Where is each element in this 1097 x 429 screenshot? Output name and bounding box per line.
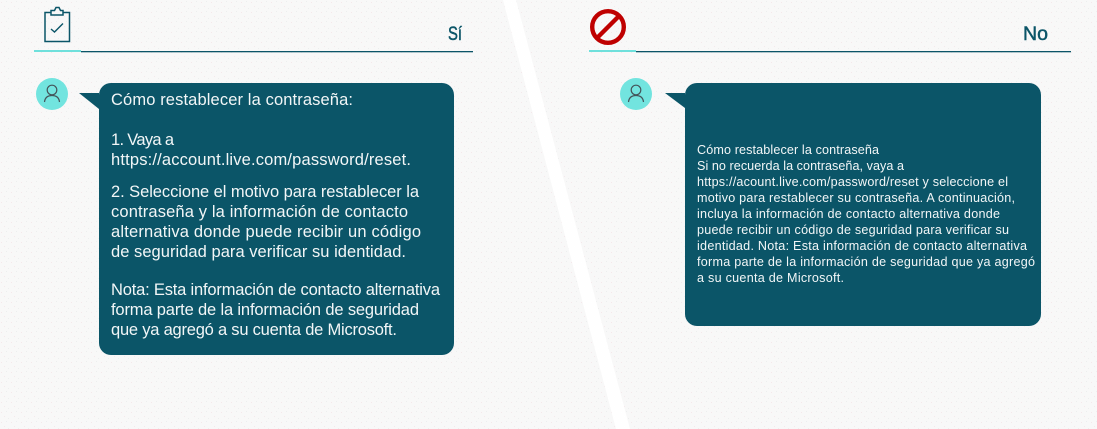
- bubble text: incluya la información de contacto alternativa donde: [697, 207, 1000, 221]
- bubble text: contraseña y la información de contacto: [111, 203, 408, 221]
- bubble text: Cómo restablecer la contraseña: [697, 143, 879, 157]
- bubble text: a su cuenta de Microsoft.: [697, 271, 844, 285]
- white diagonal divider: [503, 0, 630, 429]
- speech bubble: [79, 83, 454, 355]
- bubble text: que ya agregó a su cuenta de Microsoft.: [111, 321, 397, 339]
- bubble text: Nota: Esta información de contacto alternativa: [111, 281, 441, 299]
- icon: user avatar: [36, 78, 68, 110]
- bubble text: [111, 91, 441, 339]
- bubble text: forma parte de la información de seguridad que ya agregó: [697, 255, 1035, 269]
- bubble text: https://account.live.com/password/reset.: [111, 151, 411, 169]
- bubble text: alternativa donde puede recibir un código: [111, 223, 421, 241]
- heading: Sí: Sí: [448, 24, 463, 45]
- icon: prohibited sign: [592, 11, 624, 43]
- panel: No: [589, 11, 1071, 326]
- bubble text: de seguridad para verificar su identidad.: [111, 243, 406, 261]
- icon: user avatar: [620, 78, 652, 110]
- speech bubble: [665, 83, 1041, 326]
- bubble text: motivo para restablecer su contraseña. A continuación,: [697, 191, 1015, 205]
- bubble text: puede recibir un código de seguridad para verificar su: [697, 223, 1009, 237]
- bubble text: Si no recuerda la contraseña, vaya a: [697, 159, 904, 173]
- bubble text: forma parte de la información de seguridad: [111, 301, 419, 319]
- bubble text: Cómo restablecer la contraseña:: [111, 91, 353, 109]
- icon: clipboard with check: [45, 8, 70, 42]
- header rule: [589, 50, 1071, 52]
- bubble text: 1. Vaya a: [111, 131, 175, 149]
- header rule: [34, 50, 473, 52]
- bubble text: [697, 143, 1035, 285]
- bubble text: https://acount.live.com/password/reset y seleccione el: [697, 175, 1008, 189]
- panel: Sí: [34, 8, 473, 355]
- bubble text: identidad. Nota: Esta información de contacto alternativa: [697, 239, 1027, 253]
- heading: No: No: [1023, 24, 1048, 45]
- bubble text: 2. Seleccione el motivo para restablecer la: [111, 183, 420, 201]
